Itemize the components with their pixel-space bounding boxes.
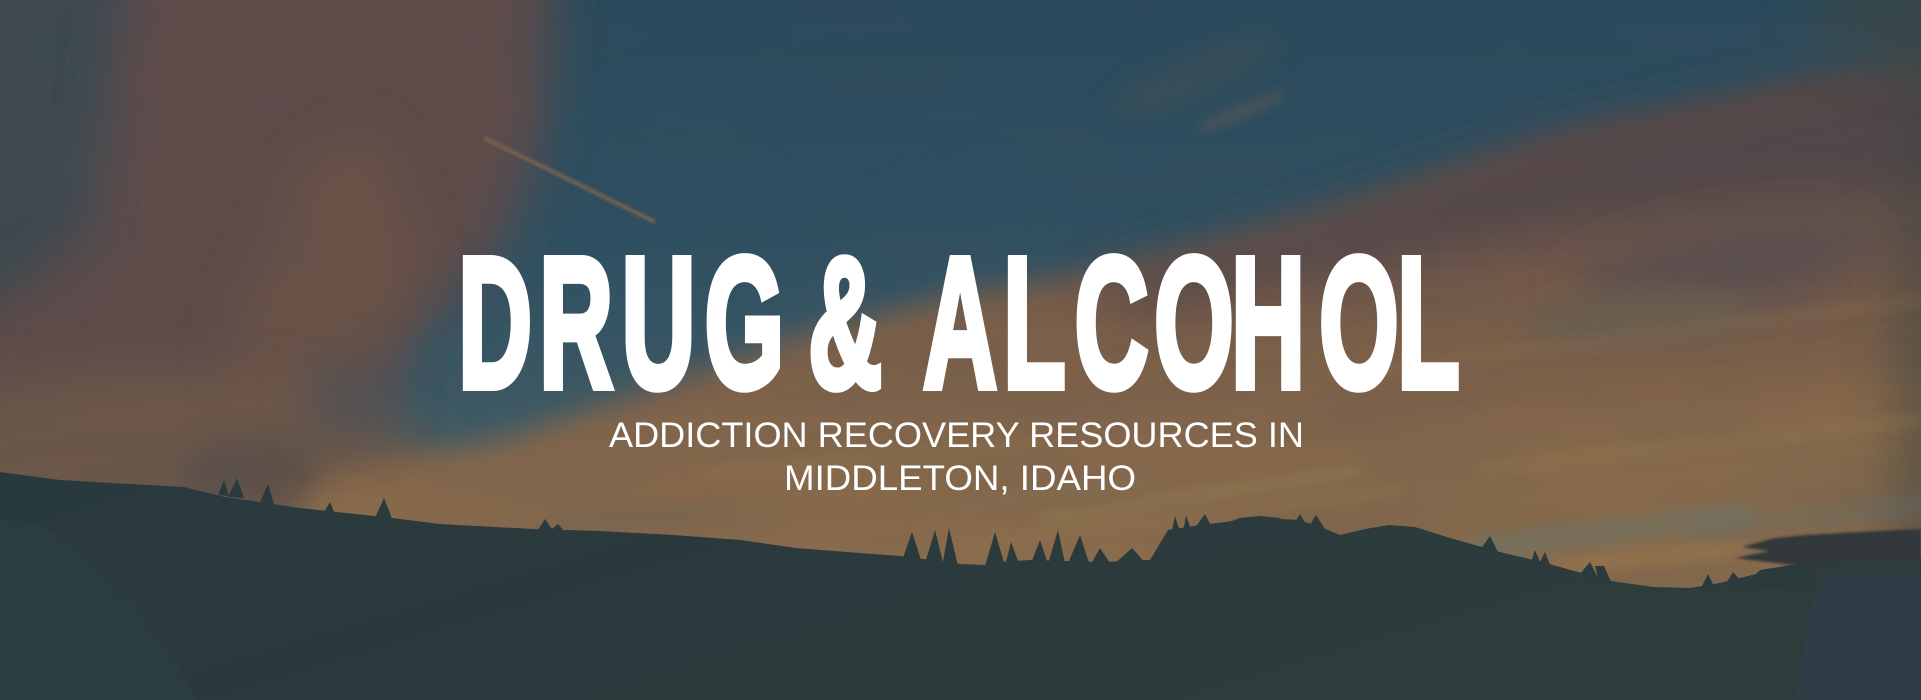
pale vignette patch bottom right	[1794, 573, 1921, 700]
title: DRUG & ALCOHOL	[458, 218, 1460, 427]
subtitle line 1: ADDICTION RECOVERY RESOURCES IN	[609, 415, 1304, 455]
tree line on the crest	[1165, 514, 1332, 562]
dark cloud on right horizon	[1735, 529, 1921, 570]
trees on left ridge	[218, 478, 565, 532]
silhouette trees	[218, 478, 1810, 590]
sunset cloud streaks	[560, 300, 1921, 565]
subtitle line 2: MIDDLETON, IDAHO	[784, 458, 1136, 498]
pale vignette patch bottom left	[0, 520, 196, 700]
trees at centre ridge	[903, 528, 1148, 568]
trees on the right slope	[1480, 536, 1810, 590]
hillside silhouette	[0, 472, 1921, 700]
contrail	[484, 138, 655, 222]
